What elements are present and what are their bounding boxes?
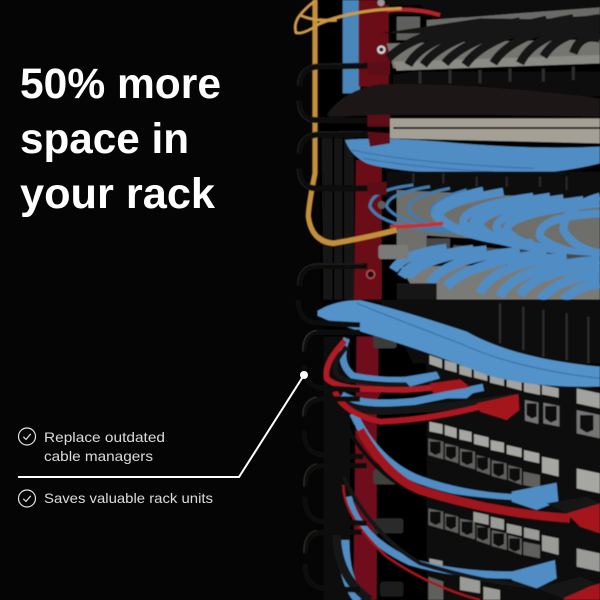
large blue flat bundle: [317, 300, 600, 387]
blue vertical cable: [343, 0, 360, 93]
photo: lower server rack with network switches: [298, 300, 600, 600]
yellow cable: [308, 0, 397, 243]
cable hooks: [298, 300, 367, 590]
text: replace outdated cable managers: [44, 429, 165, 464]
top panel: [397, 17, 420, 40]
title: [20, 61, 221, 218]
callout line with dot: [18, 371, 308, 477]
lower gray bar and blue cords: [400, 263, 600, 300]
gray patch bar: [387, 39, 600, 68]
red rail: [353, 337, 388, 600]
patch cords blue: [343, 338, 413, 380]
icon: check circle one: [18, 428, 36, 445]
upper black ports: [380, 300, 600, 363]
patch cords black: [335, 347, 433, 385]
switch one: [427, 353, 600, 460]
switch two: [427, 420, 600, 527]
silver bolts: [373, 335, 397, 348]
title: space in: [20, 116, 189, 163]
text: saves valuable rack units: Saves valuable rack units: [44, 490, 213, 506]
RJ45 plugs: [402, 372, 558, 588]
icon: check circle two: [18, 490, 36, 507]
beige strip panel: [390, 118, 600, 143]
black flat bundle: [327, 84, 600, 117]
switch three: [427, 490, 600, 600]
ports row: [387, 172, 600, 198]
text: replace outdated cable managers: cable managers: [44, 448, 153, 464]
patch cords red: [326, 341, 453, 390]
text: replace outdated cable managers: Replace outdated: [44, 429, 165, 445]
title: your rack: [20, 171, 215, 218]
blue bundle: [345, 139, 600, 175]
title: 50% more: [20, 61, 221, 108]
red vertical rail: [354, 0, 389, 300]
black cable hooks: [299, 66, 367, 287]
gray panel with blue loops: [397, 190, 600, 253]
dark vertical rail: [322, 138, 354, 300]
photo: upper server rack with patch cables: [295, 0, 600, 300]
black patch cords: [388, 18, 600, 65]
red brackets: [367, 60, 390, 195]
